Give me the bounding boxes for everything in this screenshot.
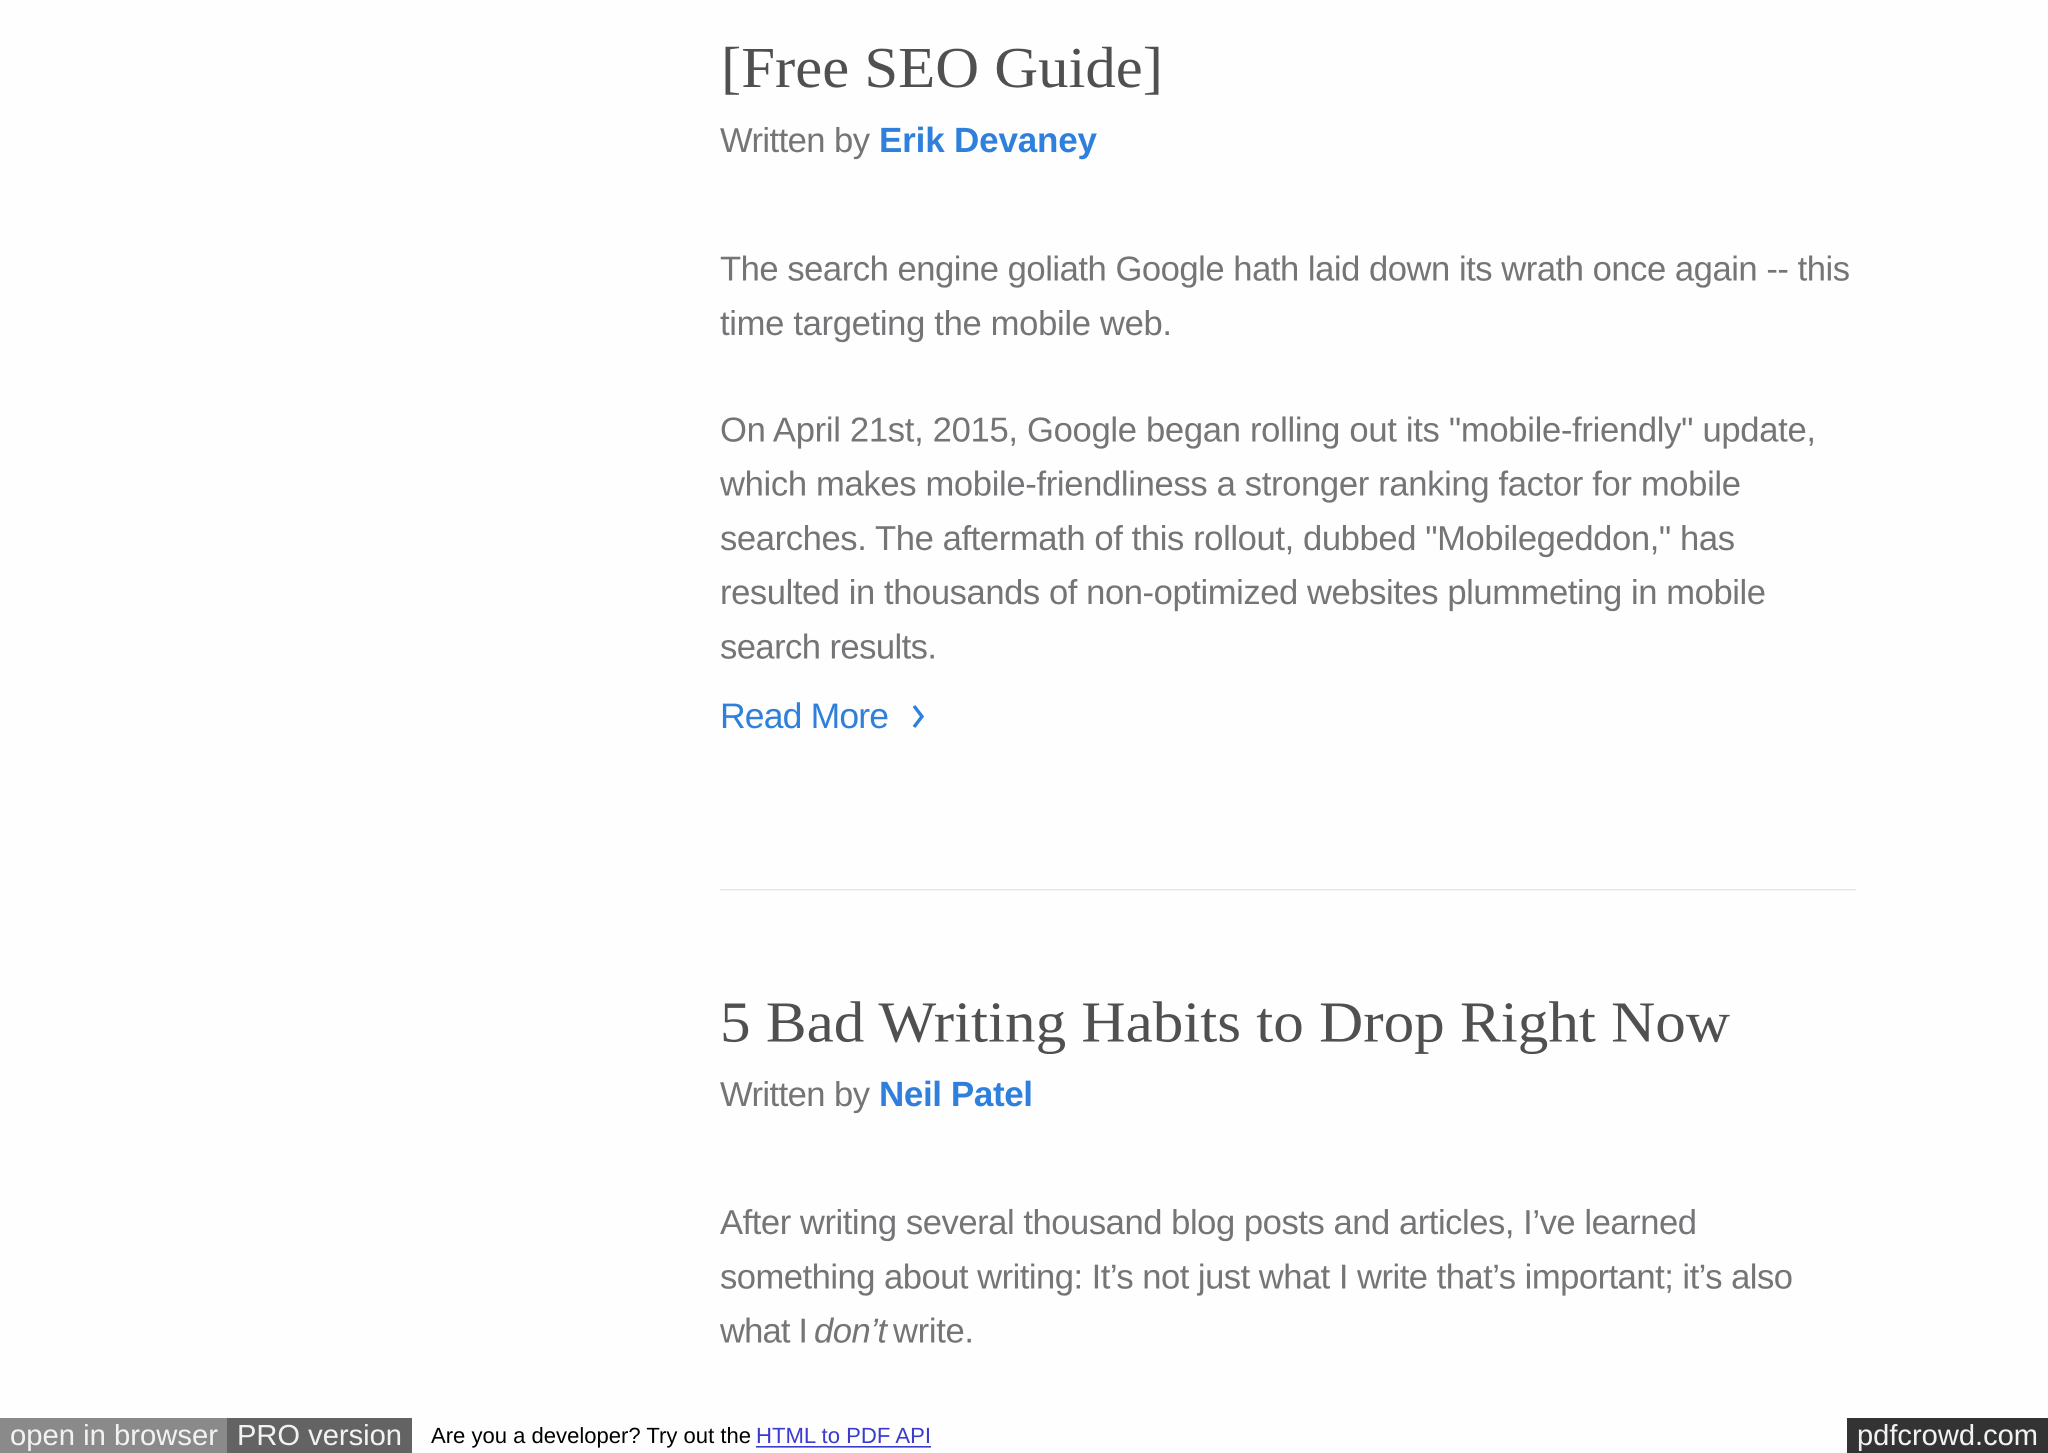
article 1 title: [Free SEO Guide] [721,35,1163,100]
article 2 paragraph: what I [719,1312,808,1350]
article 1 second paragraph: searches. The aftermath of this rollout, dubbed "Mobilegeddon," has [720,520,1735,558]
article 1 second paragraph: which makes mobile-friendliness a stronger ranking factor for mobile [719,466,1741,504]
icon: chevron right [914,706,922,727]
article 1 byline: Erik Devaney [879,121,1098,160]
article 1 intro paragraph: The search engine goliath Google hath laid down its wrath once again -- this [720,250,1850,288]
article 1 byline: Written by [720,122,871,160]
article 1 intro paragraph [720,250,1850,343]
article 1 second paragraph [719,412,1816,666]
article 2 paragraph: After writing several thousand blog posts and articles, I’ve learned [720,1204,1697,1242]
article 1 intro paragraph: time targeting the mobile web. [720,305,1172,343]
article 1 second paragraph: search results. [720,628,937,666]
article 1 [719,35,1850,736]
PRO version button: PRO version [237,1420,402,1452]
developer message: Are you a developer? Try out the [431,1423,751,1448]
footer bar [0,1418,2048,1453]
article 2 paragraph: don’t [814,1312,888,1350]
read more link: Read More [720,696,889,736]
article 2 byline [720,1075,1033,1114]
article 2 paragraph: write. [892,1312,974,1350]
article 2 byline: Written by [720,1076,871,1114]
article 1 second paragraph: On April 21st, 2015, Google began rolling out its "mobile-friendly" update, [720,412,1816,450]
article 2 [719,990,1793,1350]
article 2 paragraph [719,1204,1793,1350]
article 1 byline [720,121,1098,160]
article 2 paragraph: something about writing: It’s not just what I write that’s important; it’s also [720,1258,1793,1296]
article 2 byline: Neil Patel [879,1075,1033,1114]
API link: HTML to PDF API [756,1423,931,1448]
pdfcrowd badge: pdfcrowd.com [1857,1420,2038,1452]
article 2 title: 5 Bad Writing Habits to Drop Right Now [720,990,1730,1054]
open in browser button: open in browser [10,1420,218,1452]
article 1 second paragraph: resulted in thousands of non-optimized websites plummeting in mobile [720,574,1766,612]
